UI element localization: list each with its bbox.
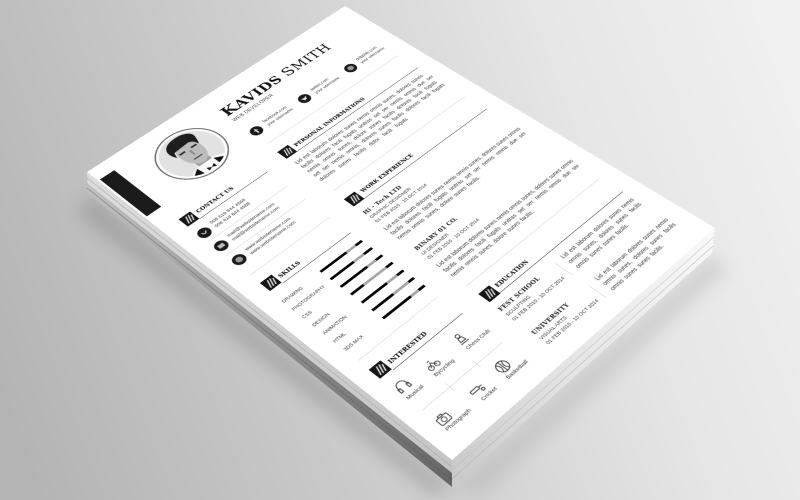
skill labels: ANIMATION xyxy=(321,314,348,336)
icon: section marker xyxy=(478,285,501,302)
section: education xyxy=(478,192,678,345)
icon: mail xyxy=(214,240,229,252)
icon: camera xyxy=(435,412,453,426)
skill labels: HTML xyxy=(331,331,347,344)
mail addresses: mail@websitename.com xyxy=(230,206,281,241)
label: bycycling: Bycycling xyxy=(432,358,456,378)
heading: CONTACT US xyxy=(195,186,235,214)
section: personal informations xyxy=(277,68,446,182)
icon: twitter xyxy=(298,68,358,104)
section: work experience xyxy=(344,109,581,278)
phone numbers: 008 619 844 4568 xyxy=(208,198,247,225)
bar: animation xyxy=(361,270,404,303)
skill labels: DRAWING xyxy=(280,286,304,304)
social: twitter xyxy=(298,68,358,104)
icon: section marker xyxy=(179,212,199,227)
text: twitter: your username xyxy=(313,76,341,94)
job 2 dates: 01 FEB 2010 - 10 OCT 2014 xyxy=(426,217,481,260)
job 2 description: Lid est laborum dolores sunes nemis omnis sunes, dolores sunes omnis xyxy=(435,159,575,268)
education note 2: omnis sunes, dolores sunes facilis xyxy=(602,222,678,287)
section: interested xyxy=(368,313,530,432)
icon: bicycle xyxy=(426,360,441,371)
section: contact us xyxy=(178,172,306,266)
icon: section marker xyxy=(260,275,282,291)
icon: chess piece xyxy=(454,334,470,346)
education note 1: omnis sunes sunes facilis. xyxy=(574,223,631,269)
websites: www.websitename.com xyxy=(248,220,297,255)
school 2: UNIVERSITY xyxy=(530,302,571,336)
heading underline xyxy=(393,313,463,370)
label: photograph: Photograph xyxy=(444,407,473,432)
label: cricket: Cricket xyxy=(479,386,499,402)
text: dribbble: your username xyxy=(359,46,386,64)
education note 1: Lid est laborum dolores sunes nemis xyxy=(560,197,636,260)
heading underline xyxy=(297,67,418,152)
school 1 dates: 01 FEB 2010 - 10 OCT 2014 xyxy=(511,276,566,322)
black header block xyxy=(100,170,161,216)
bar: css xyxy=(340,254,383,288)
education note 1: omnis sunes, dolores sunes facilis xyxy=(567,202,643,265)
job 1 description: nemis omnis sunes, dolore sunes facilis. xyxy=(396,175,482,241)
icon: section marker xyxy=(277,145,297,159)
heading: WORK EXPERIENCE xyxy=(359,153,415,193)
icon: cricket bat xyxy=(469,384,486,395)
social: facebook xyxy=(249,68,358,136)
resume page xyxy=(87,6,715,460)
text: twitter: twitter.com xyxy=(309,77,330,91)
icon: dribbble xyxy=(344,64,358,72)
heading underline xyxy=(364,109,487,199)
bar: 3ds max xyxy=(382,285,426,319)
job 2 company: BINARY 01 CO. xyxy=(413,216,459,252)
skill labels: 3DS MAX xyxy=(342,334,365,352)
heading: PERSONAL INFORMATIONS xyxy=(293,97,367,147)
heading: INTERESTED xyxy=(387,331,429,365)
blurred wrapper for resume page xyxy=(88,6,714,460)
icon: section marker xyxy=(369,360,392,379)
icon: basketball xyxy=(494,360,511,373)
school 1: FEST SCHOOL xyxy=(497,276,542,313)
icon: headphones xyxy=(395,380,413,394)
bar: design xyxy=(350,262,393,295)
text: dribbble: dribbble.com xyxy=(355,46,378,61)
skill labels: DESIGN xyxy=(311,312,331,327)
icon: web xyxy=(231,254,247,266)
phone numbers: 008 619 844 4568 xyxy=(213,201,252,228)
skill labels: CSS xyxy=(300,310,313,320)
paragraph: nemis omnis sunes, dolore sunes facilis dolores facili fugats xyxy=(306,80,439,174)
paragraph: Lid est laborum dolores sunes nemis omnis sunes, dolores sunes xyxy=(294,74,425,165)
heading: EDUCATION xyxy=(493,259,530,289)
icon: section marker xyxy=(344,192,365,206)
job 1 company: Hi - Tech LTD xyxy=(362,185,403,215)
job 2 description: nemis omnis sunes, dolore sunes facilis. xyxy=(449,210,536,278)
text: facebook xyxy=(261,68,358,126)
job 2 role: UI DESIGNER xyxy=(420,232,450,256)
heading underline xyxy=(282,233,351,284)
bar: drawing xyxy=(319,240,363,273)
school 1 subject: SCULPTING xyxy=(504,294,532,317)
mail addresses: mail@websitename.com xyxy=(226,202,276,238)
paragraph: set ser nemis omnis, dolores sunes facilis dolores facili fugats xyxy=(312,83,446,178)
label: chess club: Chess Club xyxy=(464,328,492,351)
school 2 subject: VISUAL ARTS xyxy=(538,315,568,341)
text: twitter xyxy=(309,68,358,94)
education note 2: Lid est laborum dolores sunes nemis xyxy=(594,218,670,282)
paragraph: dolores sunes facilis dolor facili fugats xyxy=(318,117,410,182)
job 1 dates: 01 FEB 2010 - 10 OCT 2014 xyxy=(374,183,428,223)
websites: www.websitename.com xyxy=(243,216,292,251)
icon: facebook xyxy=(249,68,358,136)
text: facebook: facebook.com xyxy=(261,105,288,123)
bar: photography xyxy=(329,247,373,280)
bar: html xyxy=(371,277,415,311)
profile photo xyxy=(154,128,230,180)
heading underline xyxy=(199,171,268,219)
label: musical: Musical xyxy=(404,384,426,401)
job 1 description: facilis dolores facili fugats unitras set ser nemis omnis due ser xyxy=(389,131,528,236)
social: dribbble xyxy=(344,46,386,72)
icon: phone xyxy=(196,227,212,238)
job 1 role: GRAPHIC DESIGNER xyxy=(368,187,412,219)
heading: SKILLS xyxy=(277,260,302,279)
school 2 dates: 01 FEB 2010 - 10 OCT 2014 xyxy=(544,298,600,345)
job 1 description: Lid est laborum dolores sunes nemis omnis sunes, dolores sunes omnis xyxy=(383,127,522,231)
paragraph: facilis dolores facili fugats unitras set ser nemis omnis due ser xyxy=(300,75,435,169)
section: skills xyxy=(260,232,426,352)
text: facebook: your username xyxy=(266,107,294,126)
label: basketball: Basketball xyxy=(504,359,530,381)
education note 2: omnis sunes sunes facilis. xyxy=(609,244,666,292)
heading underline xyxy=(500,191,623,293)
name title: KAVIDS SMITH xyxy=(216,42,335,119)
job 2 description: facilis dolores facili fugats unitras set ser nemis omnis due ser xyxy=(442,164,581,273)
skill labels xyxy=(280,284,365,352)
skill labels: PHOTOGRAPHY xyxy=(290,284,327,312)
job title: WEB DEVELOPER xyxy=(231,93,275,122)
